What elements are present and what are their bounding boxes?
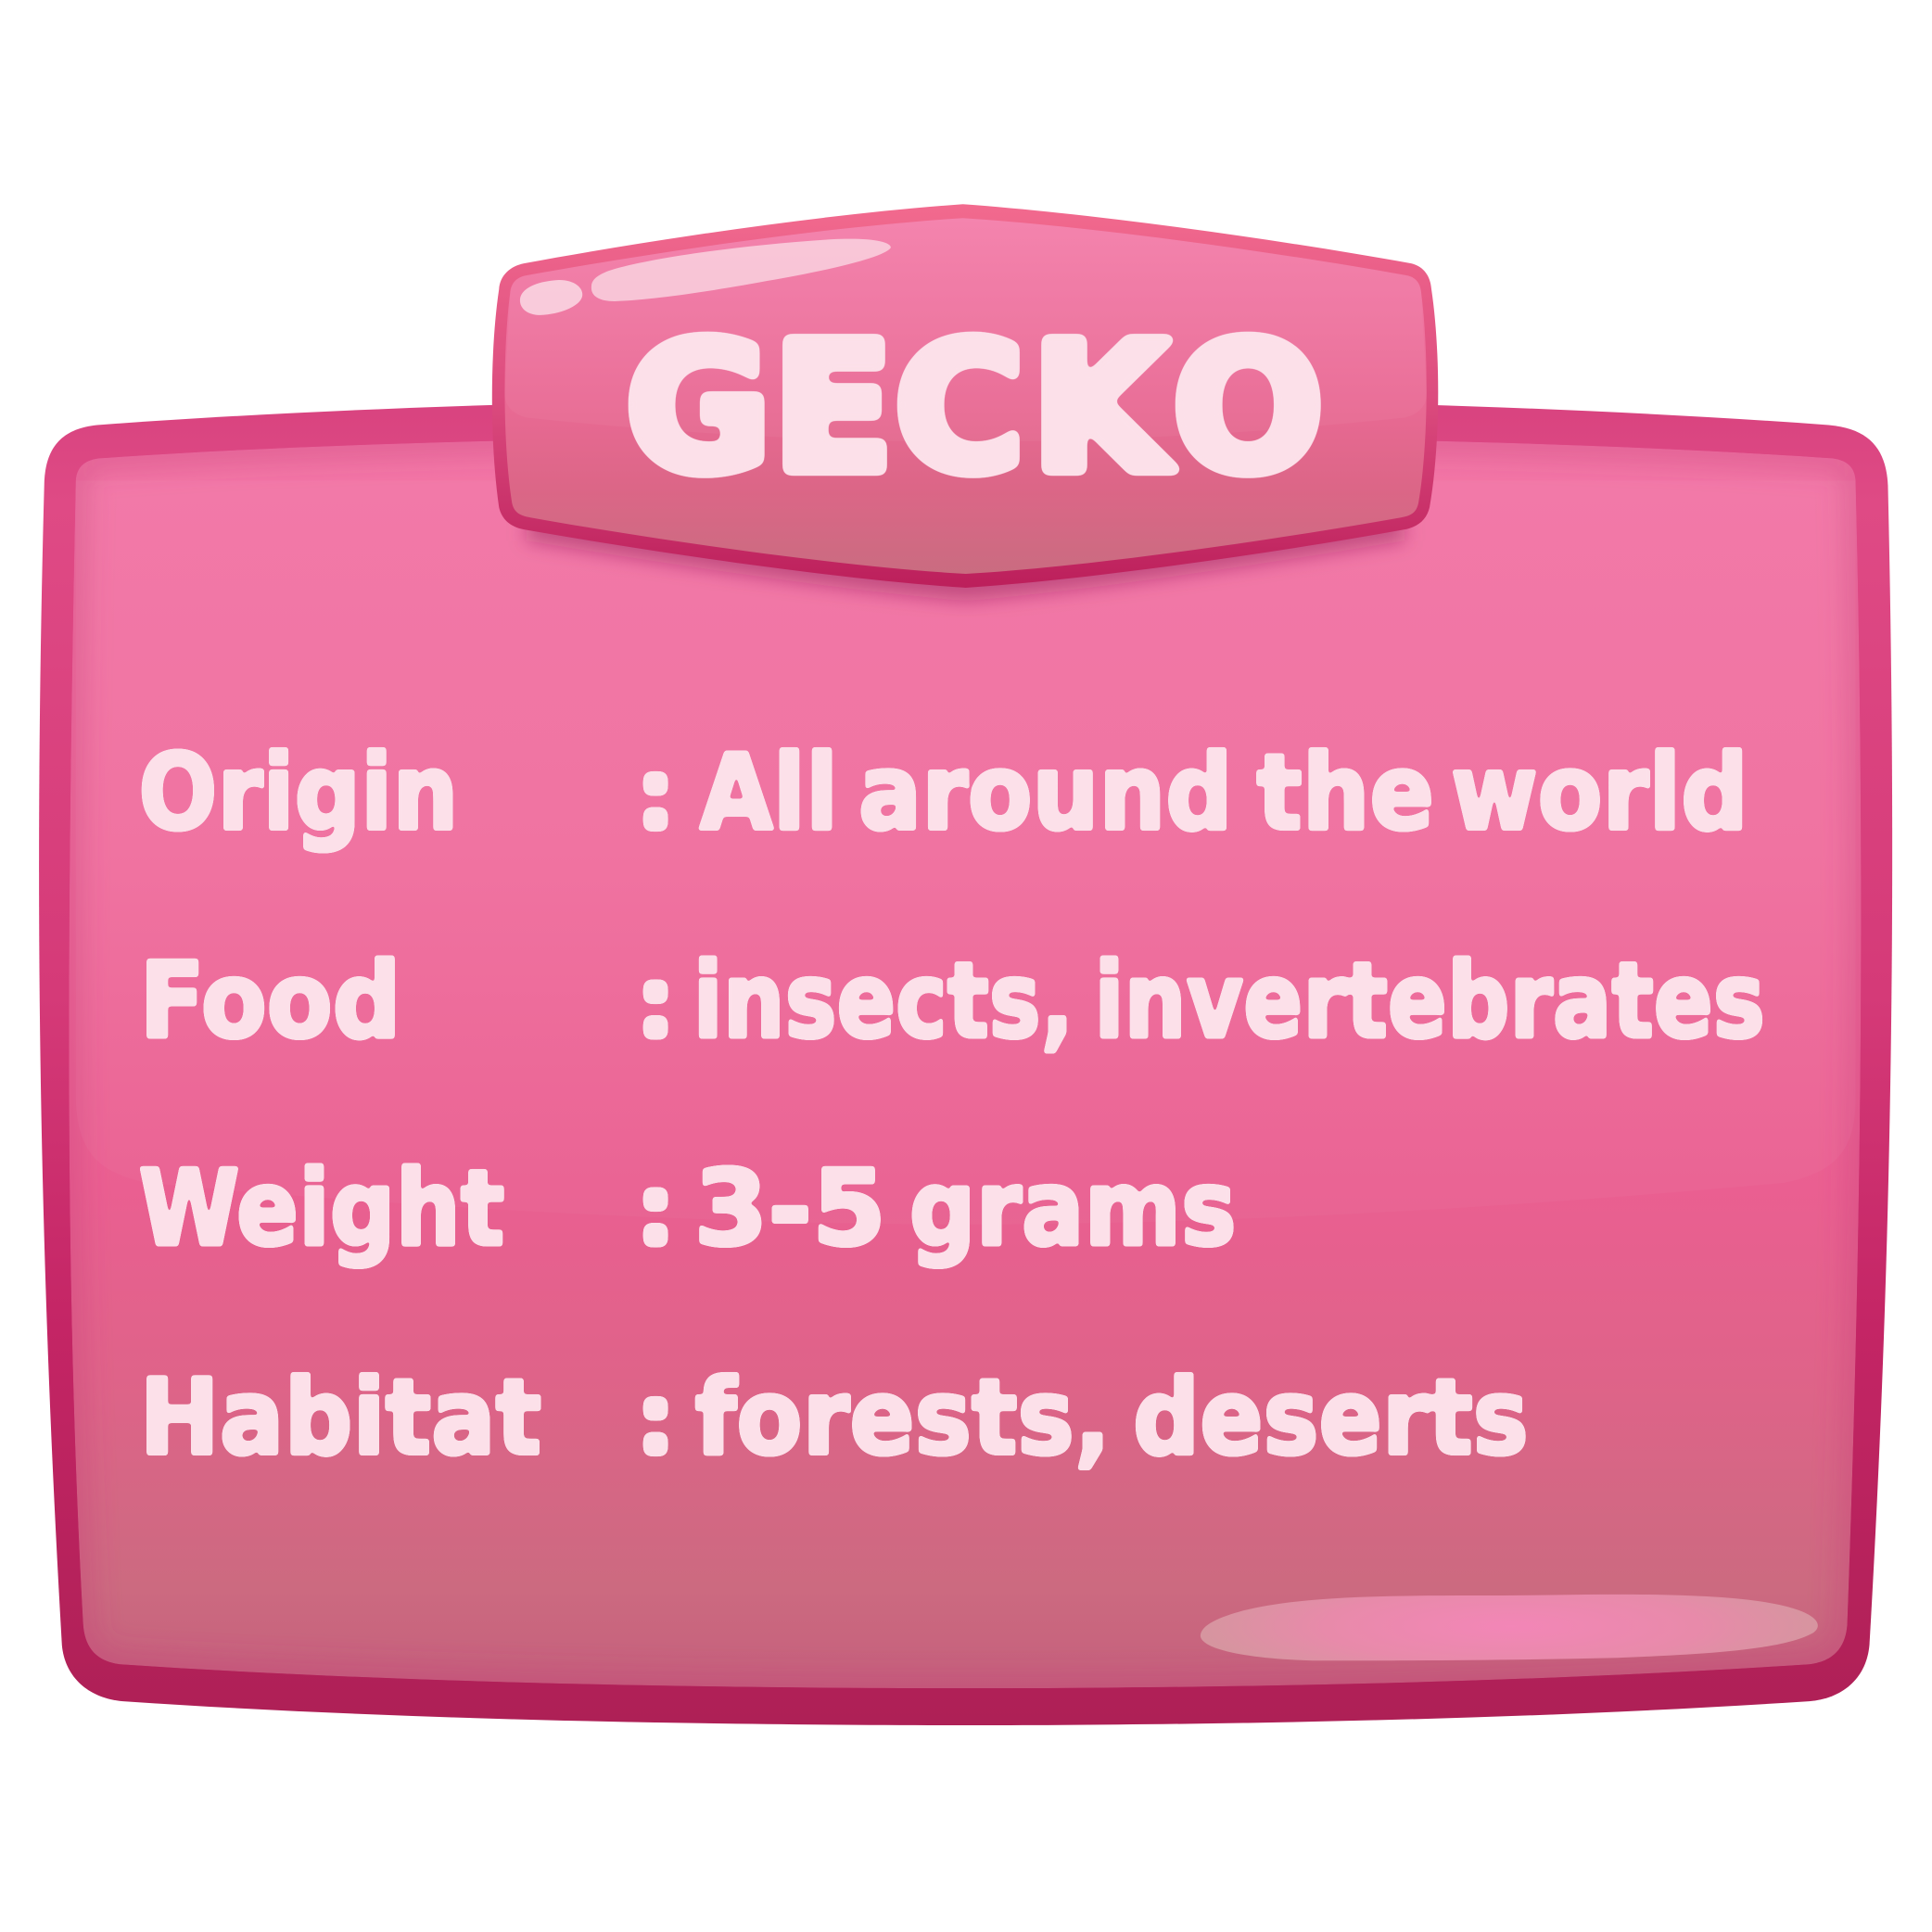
value: forests, xyxy=(695,1356,1111,1479)
value: the xyxy=(1257,731,1434,854)
badge frame xyxy=(492,204,1438,588)
badge highlight long xyxy=(591,239,891,301)
colon: : xyxy=(640,1364,672,1472)
colon: : xyxy=(640,1155,672,1264)
highlight: bottom right gloss xyxy=(1201,1595,1818,1660)
panel: main card xyxy=(0,370,1926,1756)
badge fill xyxy=(504,218,1427,574)
badge highlight small xyxy=(520,280,582,315)
value xyxy=(693,939,1765,1061)
panel outer frame xyxy=(39,398,1892,1725)
value: deserts xyxy=(1133,1356,1529,1479)
label: Food xyxy=(140,939,401,1061)
badge upper gloss xyxy=(504,218,1427,441)
row: food xyxy=(140,939,1765,1061)
value: 3-5 xyxy=(694,1148,886,1270)
title badge xyxy=(492,204,1438,588)
row: weight xyxy=(139,1148,1237,1270)
title: GECKO xyxy=(626,305,1324,512)
value: insects, xyxy=(693,939,1074,1061)
value: around xyxy=(858,731,1233,854)
panel inner fill xyxy=(69,441,1862,1688)
label: Weight xyxy=(139,1148,504,1270)
colon: : xyxy=(640,947,672,1055)
value: invertebrates xyxy=(1094,939,1765,1061)
value xyxy=(694,1148,1237,1270)
row: habitat xyxy=(140,1356,1529,1479)
value xyxy=(700,731,1748,854)
value: grams xyxy=(909,1148,1237,1270)
value: world xyxy=(1451,731,1748,854)
value xyxy=(695,1356,1529,1479)
colon: : xyxy=(640,739,672,847)
row: origin xyxy=(139,731,1748,854)
label: Habitat xyxy=(140,1356,541,1479)
badge shadow xyxy=(527,517,1405,601)
label: Origin xyxy=(139,731,458,854)
value: All xyxy=(700,731,838,854)
